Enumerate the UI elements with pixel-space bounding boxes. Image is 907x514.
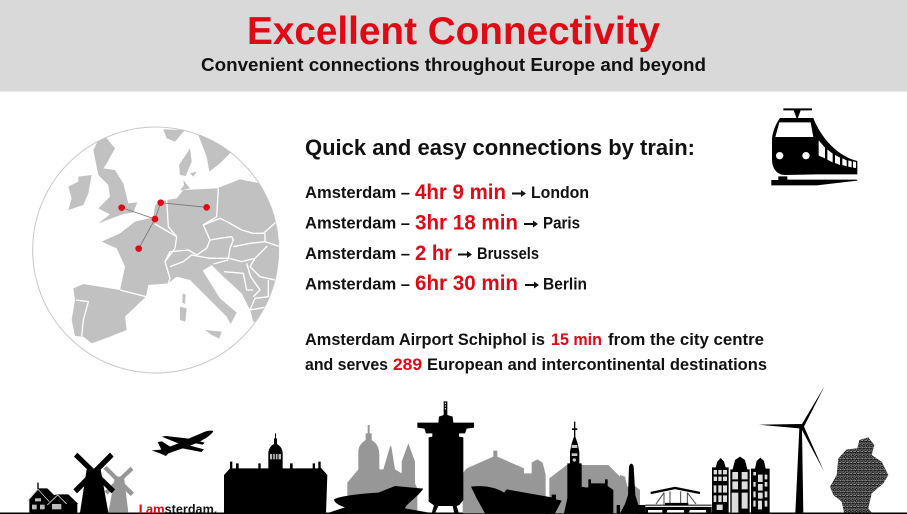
header band xyxy=(0,0,907,92)
connections heading: Quick and easy connections by train: xyxy=(305,135,695,160)
title: Excellent Connectivity xyxy=(247,10,660,53)
Scandinavia and islands xyxy=(163,129,185,142)
Schiphol text block: Amsterdam Airport Schiphol is xyxy=(305,331,545,349)
skyline: left section with house, windmills, plane and palace xyxy=(27,431,300,514)
grey churches and concert hall xyxy=(347,425,620,513)
skyline ground line xyxy=(0,512,907,514)
Schiphol text block: 15 min xyxy=(551,331,602,349)
subtitle: Convenient connections throughout Europe and beyond xyxy=(201,54,706,75)
connection row: Berlin xyxy=(305,272,587,295)
palace edge xyxy=(300,462,327,513)
house xyxy=(27,483,78,513)
skyline: centre section with churches, tower and museums xyxy=(300,401,620,513)
connection row: Paris: 3hr 18 min xyxy=(415,212,518,234)
connection row: Brussels xyxy=(305,242,539,265)
connection row: Paris: Amsterdam – xyxy=(305,214,410,232)
city markers xyxy=(118,199,210,252)
connection row: Brussels: Brussels xyxy=(477,245,539,263)
skyline: right section with obelisk, bridge, canal houses, wind turbine and sculpture xyxy=(620,386,888,513)
grey building remnant xyxy=(620,475,640,513)
connection row: Berlin: Amsterdam – xyxy=(305,276,410,294)
icon: airplane xyxy=(152,431,213,456)
museum: right ship xyxy=(471,486,562,513)
continental Europe xyxy=(72,179,287,343)
Ireland xyxy=(68,175,92,210)
icon: train xyxy=(771,108,857,185)
grey windmill xyxy=(103,466,134,513)
icon: wind turbine xyxy=(759,386,825,513)
connection row: London: London xyxy=(531,184,589,202)
connection row: London: 4hr 9 min xyxy=(415,181,506,204)
connection row: London xyxy=(305,181,589,204)
Schiphol text block: European and intercontinental destinations xyxy=(427,356,767,374)
connection row: Berlin: Berlin xyxy=(543,276,587,294)
canal houses xyxy=(712,458,729,513)
wire sculpture xyxy=(830,437,888,513)
Schiphol text block: from the city centre xyxy=(608,331,764,349)
rail route lines xyxy=(122,203,207,249)
black windmill xyxy=(73,453,115,513)
museum: left ship xyxy=(327,486,433,513)
map of Europe with rail routes xyxy=(33,127,287,373)
national borders xyxy=(76,188,280,336)
observation tower xyxy=(417,401,474,513)
connection row: Brussels: 2 hr xyxy=(415,242,452,265)
connection row: Paris: Paris xyxy=(543,214,580,232)
Schiphol text block xyxy=(305,331,767,374)
logo: I amsterdam xyxy=(139,501,217,514)
connection row: Berlin: 6hr 30 min xyxy=(415,272,518,295)
connection row: Paris xyxy=(305,212,580,234)
church tower and buildings xyxy=(564,422,613,513)
Mediterranean islands xyxy=(205,330,222,339)
Schiphol text block: 289 xyxy=(393,356,422,374)
palace xyxy=(224,433,300,513)
obelisk xyxy=(620,464,645,513)
drawbridge xyxy=(645,488,712,505)
connection row: Brussels: Amsterdam – xyxy=(305,245,410,263)
Great Britain xyxy=(93,137,137,223)
Schiphol text block: and serves xyxy=(305,356,388,374)
connection row: London: Amsterdam – xyxy=(305,184,410,202)
